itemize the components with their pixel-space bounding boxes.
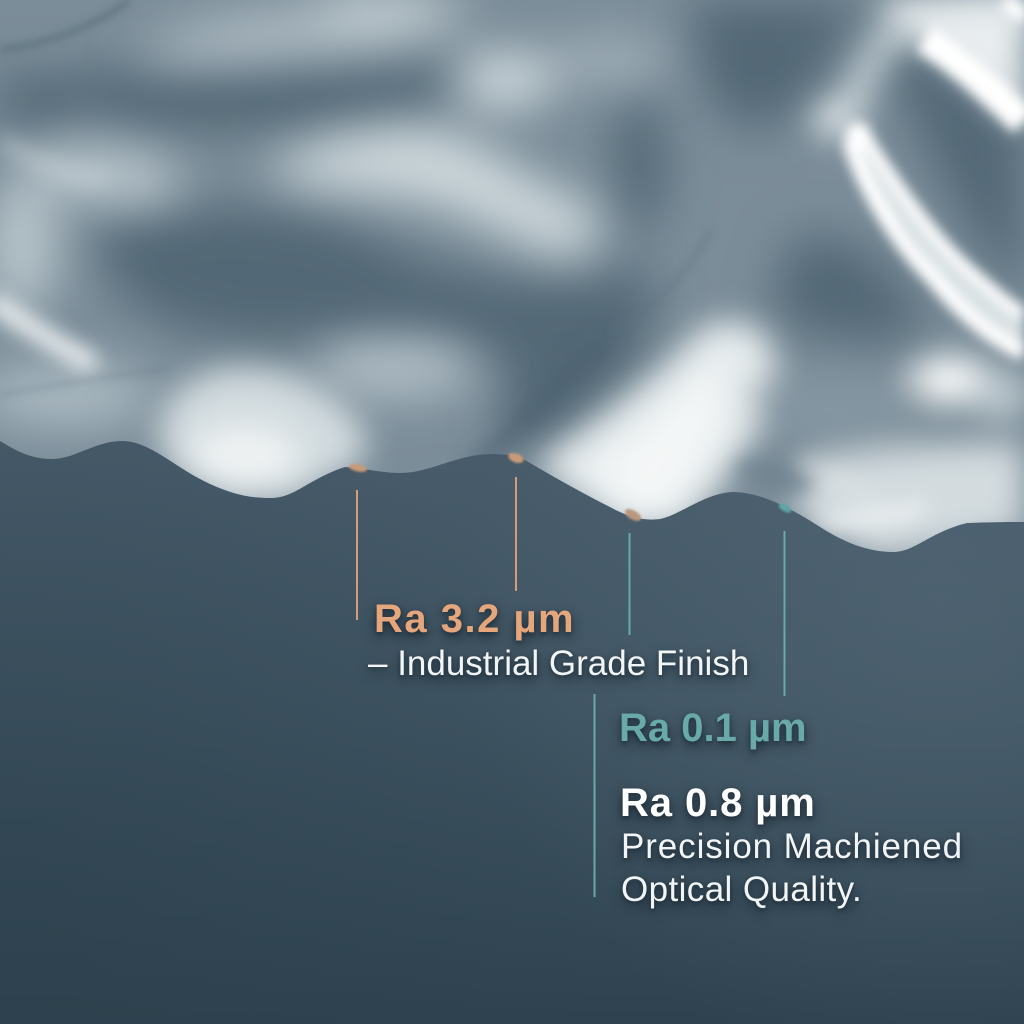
leader lines bbox=[357, 477, 784, 897]
wavy metal surface bbox=[0, 0, 1024, 560]
text: Precision Machiened Optical Quality.: Optical Quality. bbox=[621, 870, 862, 909]
label: Ra 0.8 µm: Ra 0.8 µm bbox=[620, 781, 816, 825]
label: Ra 3.2 µm: Ra 3.2 µm bbox=[374, 597, 575, 641]
label: Industrial Grade Finish: – Industrial Grade Finish bbox=[368, 644, 749, 683]
thin fold creases bbox=[1, 0, 131, 396]
label: Ra 0.1 µm: Ra 0.1 µm bbox=[619, 706, 807, 750]
white streaks bbox=[880, 0, 1024, 125]
text: Precision Machiened Optical Quality. bbox=[620, 827, 964, 914]
soft light bands bbox=[0, 0, 670, 427]
Ra marker dots on the surface profile bbox=[348, 451, 793, 523]
large dark folds bbox=[0, 0, 1024, 455]
bright highlights bbox=[158, 0, 1024, 560]
text: Precision Machiened Optical Quality.: Precision Machiened bbox=[621, 827, 963, 866]
